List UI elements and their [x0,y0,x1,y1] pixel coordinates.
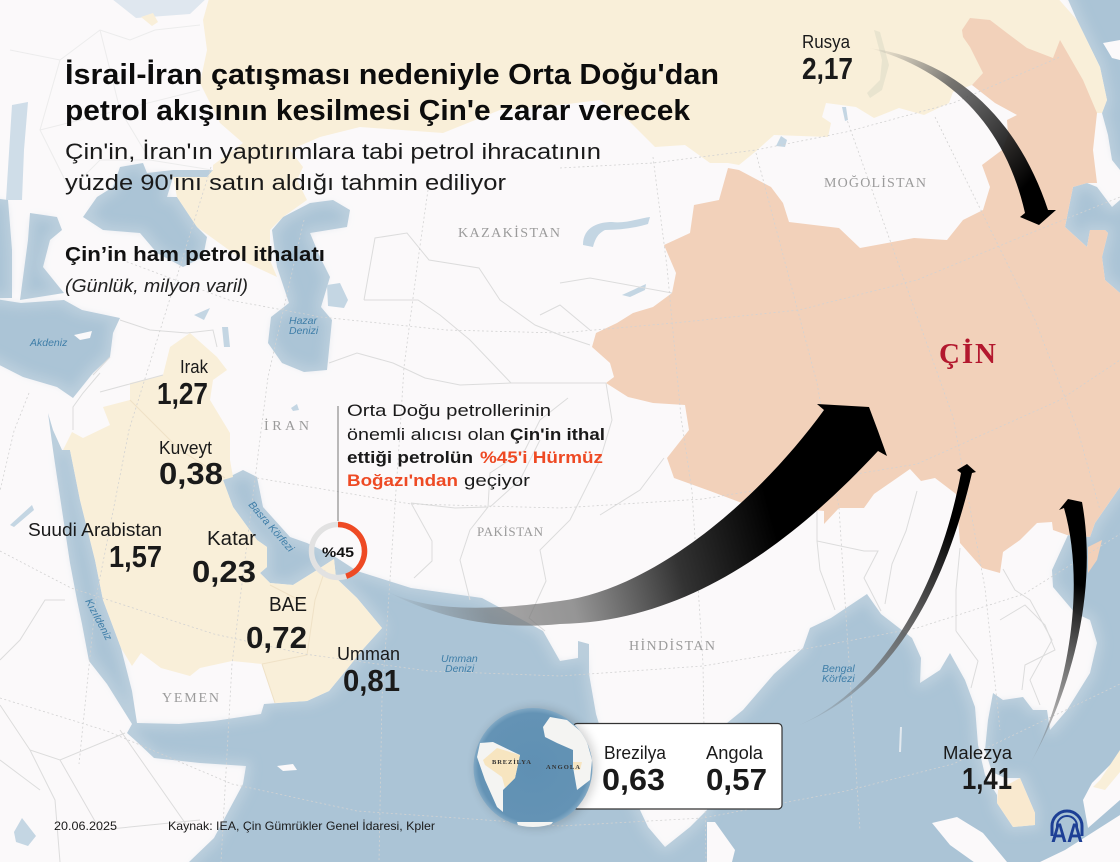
value: Iraq: 1,27 [157,376,208,411]
logo: AA [1051,811,1083,848]
date: 20.06.2025 [54,819,117,833]
callout text: ettiği petrolün [347,448,473,467]
value: UAE [246,594,307,655]
sea label: Mediterranean: Akdeniz [29,337,68,349]
value: UAE: BAE [269,594,307,616]
callout text: %45'i Hürmüz [480,448,603,467]
value: Oman: Umman [337,644,400,664]
value: Malaysia: Malezya [943,743,1013,763]
callout text: önemli alıcısı olan [347,425,505,444]
map: European borders [10,25,212,190]
Hormuz callout leader line [337,406,339,521]
sea label: Arabian Sea: Umman [441,653,478,665]
value: Angola: Angola [706,743,764,763]
value: Malaysia [943,743,1013,796]
map: Kaliningrad [141,13,158,26]
map: Malaysia [997,778,1035,827]
callout text: Çin'in ithal [510,425,605,444]
arrow: Malaysia to China [1022,499,1087,777]
value: Brazil: Brezilya [604,743,667,763]
globe: Brazil and Angola locator: ANGOLA [546,764,580,771]
callout text: Boğazı'ndan [347,471,458,490]
country label: Kazakhstan: KAZAKİSTAN [458,225,560,241]
map: Arabian inner borders [130,400,325,703]
map: Malaysian Borneo [1093,750,1120,790]
map: Hainan-side coast [1088,540,1102,573]
country label: China: ÇİN [939,337,996,370]
value: Kuwait [159,438,223,491]
chart heading: Çin’in ham petrol ithalatı [65,244,325,266]
country label: Pakistan: PAKİSTAN [477,524,544,539]
sea label: Arabian Sea: Denizi [445,663,475,675]
sea label: Caspian: Hazar [289,315,317,327]
value: Brazil [602,743,667,797]
callout text: Orta Doğu petrollerinin [347,401,551,420]
value: Saudi Arabia: Suudi Arabistan [28,520,162,540]
sea label: Persian Gulf: Basra Körfezi [246,499,297,555]
country label: India: HİNDİSTAN [629,638,715,654]
callout text: geçiyor [464,471,530,490]
map: lake Baikal [867,30,889,98]
value: Kuwait: 0,38 [159,456,223,491]
arrow: Russia to China [869,48,1056,225]
donut: 45 percent via Hormuz: %45 [322,544,354,560]
map: China [592,18,1120,573]
value: Oman [337,644,400,698]
map: country borders [0,233,1055,862]
title: petrol akışının kesilmesi Çin'e zarar verecek [65,95,690,127]
value: Kuwait: Kuveyt [159,438,212,458]
value: Angola [706,743,767,797]
map: Middle East importers [63,333,382,703]
value: Iraq [157,357,209,411]
value: Iraq: Irak [180,357,209,377]
value: Russia [802,32,853,86]
globe: Brazil and Angola locator [474,708,596,832]
logo: AA: AA [1051,818,1083,848]
title: İsrail-İran çatışması nedeniyle Orta Doğu'dan [65,59,719,91]
country label: Iran: İRAN [264,418,309,434]
arrow: Middle East to China [386,404,887,626]
map: small water bodies [6,0,848,846]
country label: Mongolia: MOĞOLİSTAN [824,174,926,191]
value: Russia: 2,17 [802,51,853,86]
value: Saudi Arabia [28,520,162,574]
subtitle: Çin'in, İran'ın yaptırımlara tabi petrol ihracatının [65,139,601,164]
country label: Yemen: YEMEN [162,691,219,706]
panel: Brazil and Angola values [573,724,782,809]
subtitle: yüzde 90'ını satın aldığı tahmin ediliyor [65,170,507,195]
value: Qatar [192,528,256,589]
value: Oman: 0,81 [343,663,400,698]
arrow: Brazil and Angola to China [792,464,976,728]
value: Malaysia: 1,41 [962,761,1012,796]
map: Russia [173,0,1107,277]
value: Qatar: 0,23 [192,554,256,589]
source: Kaynak: IEA, Çin Gümrükler Genel İdaresi, Kpler [168,819,435,833]
value: UAE: 0,72 [246,620,307,655]
unit note: (Günlük, milyon varil) [65,276,248,296]
value: Saudi Arabia: 1,57 [109,539,162,574]
value: Brazil: 0,63 [602,762,665,797]
value: Russia: Rusya [802,32,851,52]
sea label: Bay of Bengal: Bengal [822,663,855,675]
donut: 45 percent via Hormuz [312,524,365,578]
sea label: Red Sea: Kızıldeniz [82,597,115,643]
globe: Brazil and Angola locator: BREZİLYA [492,759,531,766]
value: Angola: 0,57 [706,762,767,797]
value: Qatar: Katar [207,528,256,550]
sea label: Caspian: Denizi [289,325,319,337]
sea label: Bay of Bengal: Körfezi [822,673,855,685]
